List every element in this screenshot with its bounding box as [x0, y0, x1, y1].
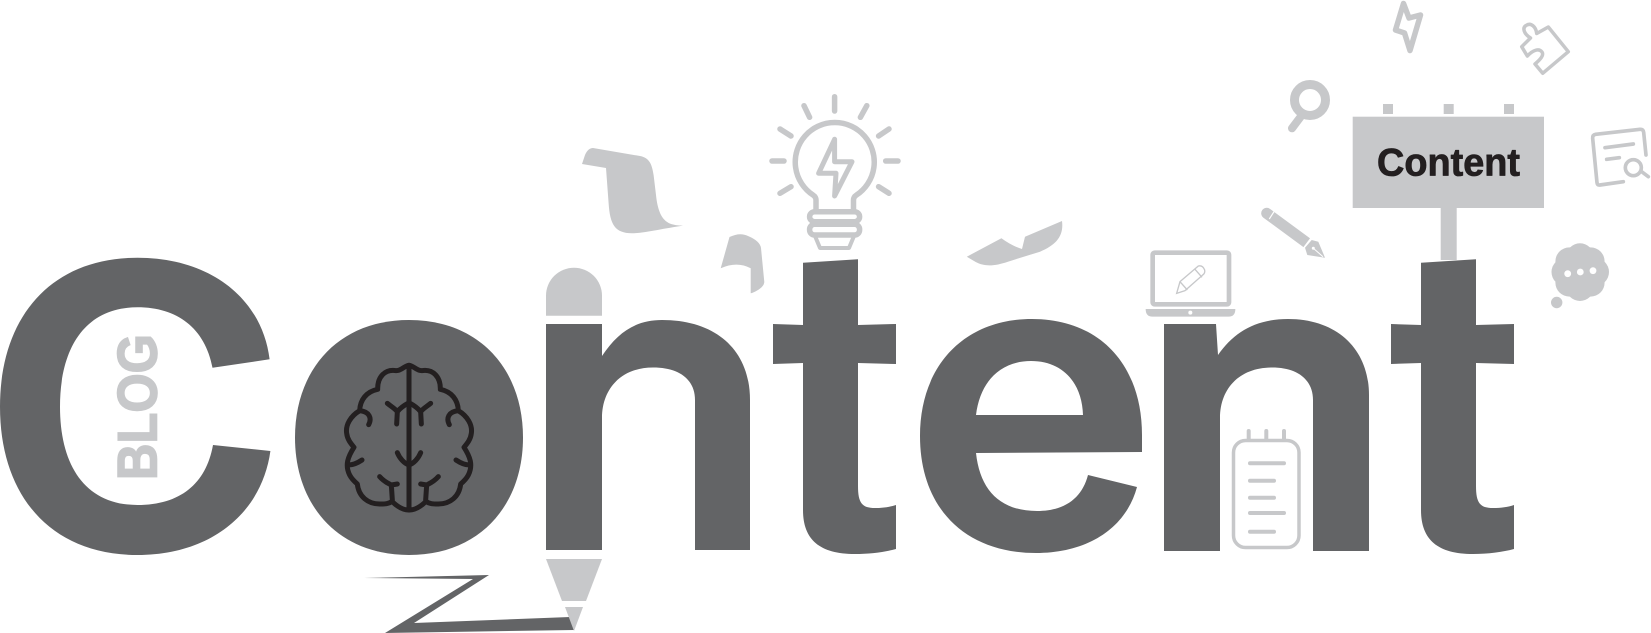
letter e	[920, 319, 1142, 553]
icon: lightning outline	[1396, 4, 1420, 50]
icon: magnifying glass	[1292, 84, 1326, 128]
fragment: curled paper	[582, 148, 683, 233]
billboard pole	[1441, 208, 1457, 260]
billboard text: Content	[1377, 142, 1520, 184]
letter n second	[1164, 319, 1369, 551]
bulb rays	[772, 97, 898, 193]
icon: laptop with pencil	[1146, 253, 1235, 317]
billboard lights	[1383, 104, 1514, 114]
letter t second	[1391, 259, 1514, 554]
pencil eraser	[546, 268, 602, 316]
fragment: swoosh	[967, 221, 1062, 265]
billboard panel	[1353, 117, 1544, 208]
letter n	[546, 320, 750, 550]
billboard	[1353, 104, 1544, 260]
icon: notepad	[1234, 431, 1299, 548]
icon: pencil made from the n stem	[364, 268, 602, 633]
vertical BLOG label: BLOG	[106, 334, 168, 480]
icon: light bulb	[772, 97, 898, 248]
paper fragments	[582, 148, 1062, 293]
icon: fountain pen	[1267, 212, 1325, 258]
fragment: small curl	[721, 234, 764, 293]
pencil lead	[565, 607, 583, 631]
bulb glass	[795, 123, 874, 209]
icon: thought bubble	[1551, 243, 1609, 308]
letter C	[0, 258, 270, 555]
pencil tip	[546, 559, 602, 601]
letter t	[773, 259, 896, 554]
wordmark: Content	[0, 258, 1514, 555]
lightning bolt in bulb	[819, 139, 852, 196]
bulb base	[810, 212, 860, 248]
letter o	[295, 320, 523, 555]
icon: puzzle piece	[1522, 24, 1568, 73]
pencil scribble	[364, 575, 574, 633]
icon: brain	[346, 365, 472, 510]
icon: document search	[1593, 129, 1648, 185]
